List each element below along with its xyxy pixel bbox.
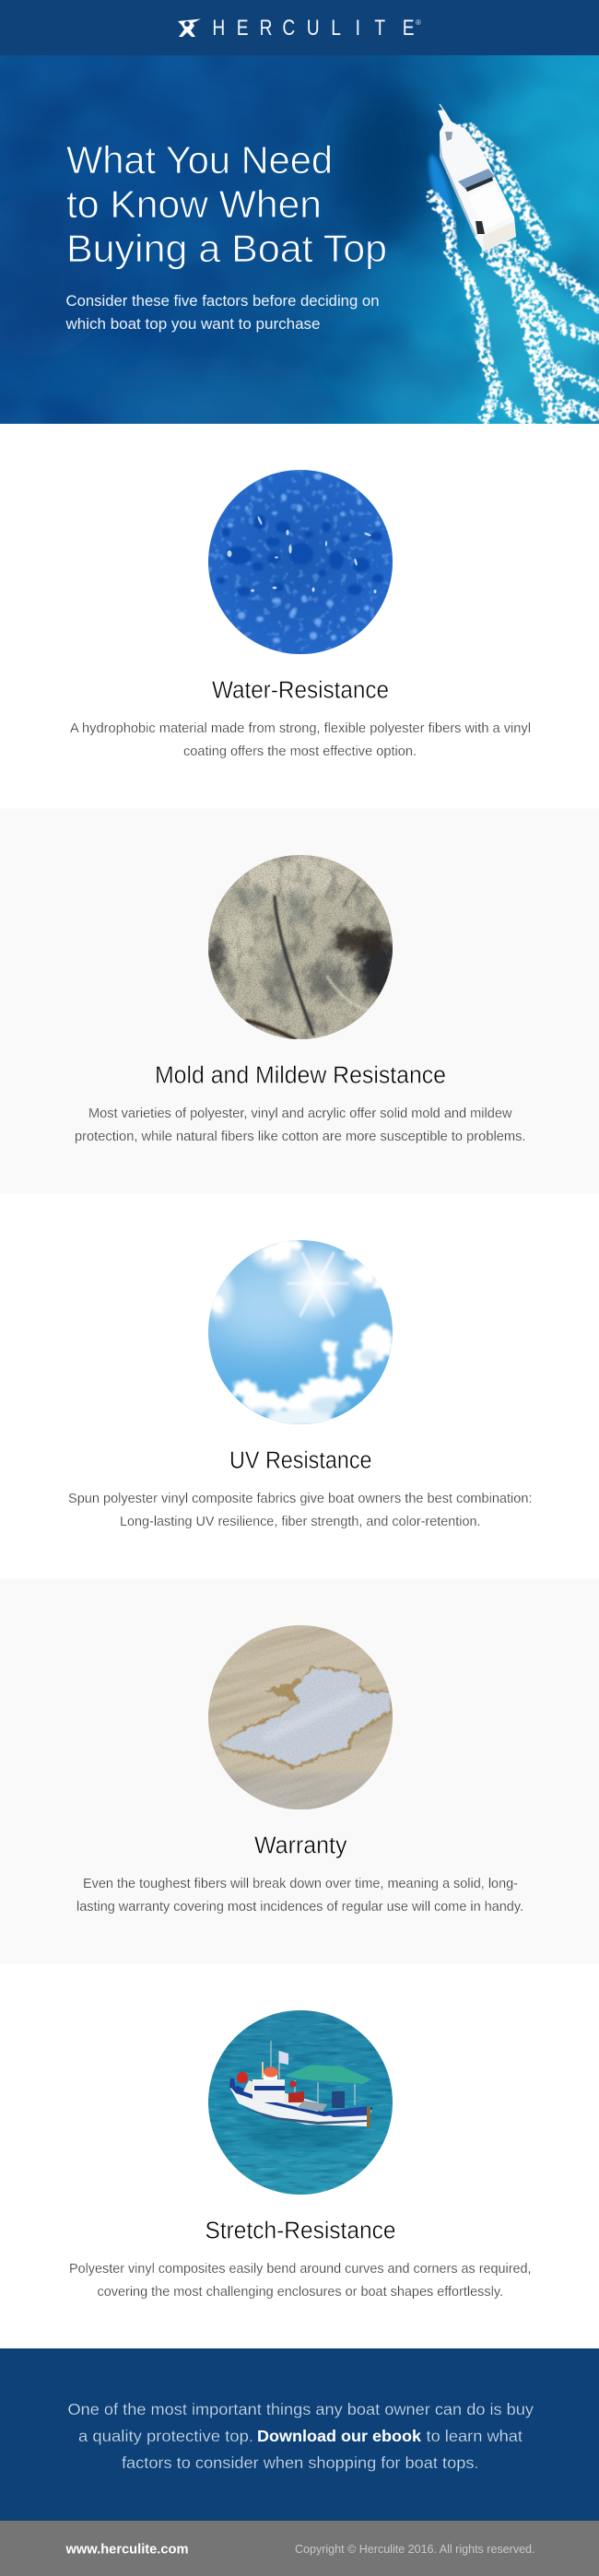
- description: coating offers the most effective option.: [183, 744, 417, 759]
- call-to-action text: a quality protective top.: [78, 2427, 253, 2445]
- photo: fishing boat on teal water: [208, 2010, 393, 2195]
- panel: uv resistance: [68, 1240, 531, 1528]
- boat wake: [433, 129, 599, 424]
- copyright: Copyright © Herculite 2016. All rights reserved.: [295, 2542, 534, 2556]
- logo icon: [178, 18, 201, 37]
- hero subtitle: Consider these five factors before deciding on: [66, 293, 380, 310]
- description: Most varieties of polyester, vinyl and acrylic offer solid mold and mildew: [88, 1107, 512, 1121]
- description: A hydrophobic material made from strong, flexible polyester fibers with a vinyl: [70, 721, 531, 736]
- heading: Warranty: [254, 1833, 347, 1859]
- description: lasting warranty covering most incidences of regular use will come in handy.: [76, 1900, 523, 1914]
- panel: water-resistance: [70, 470, 530, 758]
- hero subtitle: which boat top you want to purchase: [65, 316, 321, 333]
- description: [76, 1877, 523, 1914]
- panel: call to action: [0, 2348, 599, 2521]
- call-to-action text: factors to consider when shopping for boat tops.: [122, 2453, 479, 2472]
- heading: Stretch-Resistance: [205, 2219, 396, 2244]
- photo: mildewed fabric: [208, 855, 396, 1039]
- description: Spun polyester vinyl composite fabrics give boat owners the best combination:: [68, 1492, 533, 1506]
- heading: UV Resistance: [229, 1448, 372, 1474]
- photo: sun and clouds: [206, 1238, 393, 1426]
- heading: Water-Resistance: [212, 678, 389, 704]
- description: Long-lasting UV resilience, fiber strength, and color-retention.: [120, 1515, 481, 1529]
- logo wordmark: HERCULITE: [212, 15, 415, 41]
- hero title: What You Need: [66, 138, 333, 181]
- hero photo: open water: [0, 55, 599, 447]
- website: www.herculite.com: [65, 2541, 188, 2558]
- description: [70, 721, 531, 759]
- panel: mold and mildew resistance: [76, 855, 525, 1143]
- description: Polyester vinyl composites easily bend around curves and corners as required,: [69, 2262, 531, 2277]
- header bar: [0, 0, 599, 55]
- photo: torn fabric: [208, 1625, 393, 1809]
- sun: [279, 1246, 354, 1321]
- description: [69, 2262, 531, 2300]
- description: [68, 1492, 533, 1529]
- panel: stretch-resistance: [70, 2010, 531, 2299]
- call-to-action text: One of the most important things any boat owner can do is buy: [68, 2400, 534, 2418]
- call-to-action text: Download our ebook: [257, 2427, 421, 2445]
- footer: [0, 2521, 599, 2576]
- call-to-action text: to learn what: [426, 2427, 523, 2445]
- hero subtitle: [65, 293, 380, 333]
- heading: Mold and Mildew Resistance: [155, 1063, 446, 1089]
- boat: [229, 2041, 372, 2127]
- panel: hero: [0, 55, 599, 447]
- call-to-action text: [68, 2400, 534, 2472]
- hero title: Buying a Boat Top: [66, 227, 387, 270]
- description: [75, 1107, 525, 1144]
- panel: warranty: [77, 1625, 523, 1914]
- photo: water droplets on blue fabric: [208, 470, 393, 654]
- hero title: [66, 138, 387, 270]
- hero title: to Know When: [66, 182, 322, 226]
- description: covering the most challenging enclosures or boat shapes effortlessly.: [98, 2285, 503, 2300]
- description: protection, while natural fibers like cotton are more susceptible to problems.: [75, 1130, 525, 1144]
- boat: [438, 104, 516, 252]
- registered mark: ®: [416, 18, 421, 27]
- description: Even the toughest fibers will break down over time, meaning a solid, long-: [83, 1877, 518, 1891]
- torn edge: [219, 1666, 392, 1769]
